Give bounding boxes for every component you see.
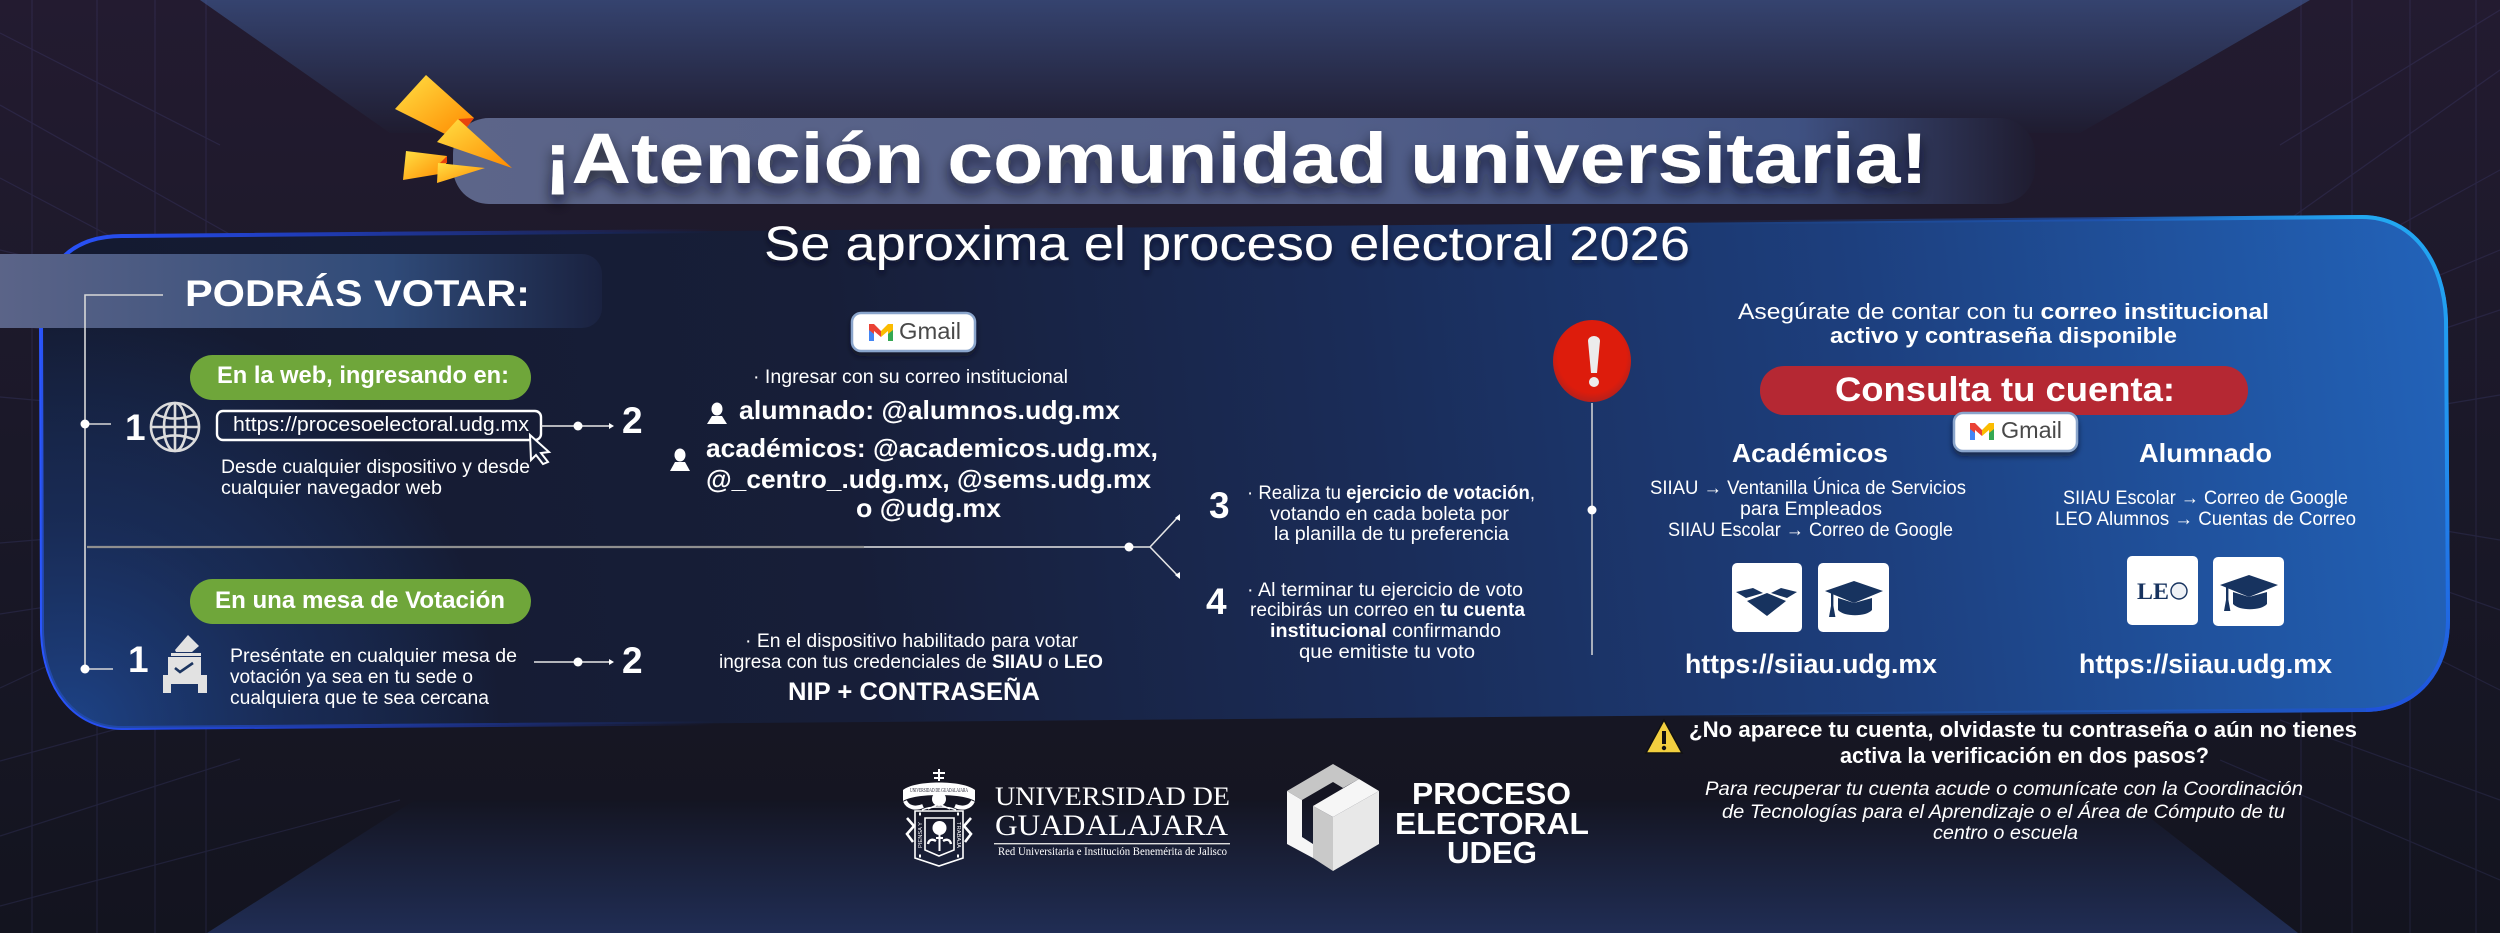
icon: hexagon cube bbox=[1287, 764, 1379, 871]
recovery note: centro o escuela bbox=[1933, 823, 2078, 844]
polling credentials text: ingresa con tus credenciales de SIIAU o LEO bbox=[719, 652, 1103, 673]
text: gmail login instructions: alumnado: @alumnos.udg.mx bbox=[739, 395, 1121, 425]
polling description: votación ya sea en tu sede o bbox=[230, 667, 473, 688]
logo: proceso electoral udeg: PROCESO bbox=[1412, 776, 1571, 811]
polling description: Preséntate en cualquier mesa de bbox=[230, 646, 517, 667]
icon: crest: PIENSA Y bbox=[918, 821, 924, 848]
button: consulta tu cuenta bbox=[1760, 366, 2248, 415]
badge: gmail top: Gmail bbox=[899, 318, 961, 344]
step number 1: 1 bbox=[125, 407, 146, 448]
section: voting at a polling table bbox=[128, 579, 1103, 709]
badge: gmail second: Gmail bbox=[2001, 417, 2062, 443]
icon: leo tile: LE bbox=[2137, 579, 2169, 604]
subtitle: Se aproxima el proceso electoral 2026 bbox=[764, 218, 1690, 271]
column: alumnado: SIIAU Escolar → Correo de Google bbox=[2063, 488, 2348, 509]
url box bbox=[217, 411, 541, 440]
icon: student person bbox=[707, 402, 727, 424]
web description: cualquier navegador web bbox=[221, 478, 442, 499]
pill: en la web bbox=[190, 355, 531, 400]
polling credentials text: · En el dispositivo habilitado para votar bbox=[745, 631, 1079, 652]
logo: proceso electoral udeg: ELECTORAL bbox=[1395, 806, 1589, 841]
logo: universidad de guadalajara: GUADALAJARA bbox=[995, 809, 1228, 842]
warning message: ¿No aparece tu cuenta, olvidaste tu contraseña o aún no tienes bbox=[1689, 717, 2357, 742]
column: académicos: SIIAU Escolar → Correo de Google bbox=[1668, 520, 1953, 541]
panel border: right edge bbox=[2362, 217, 2448, 710]
recovery note bbox=[1705, 779, 2303, 844]
step 3: la planilla de tu preferencia bbox=[1274, 524, 1509, 545]
step number 2: 2 bbox=[622, 640, 643, 681]
section: voting on the web bbox=[125, 355, 643, 499]
logo: universidad de guadalajara bbox=[903, 769, 1230, 866]
step number 1: 1 bbox=[128, 639, 149, 680]
badge: gmail second bbox=[1954, 413, 2077, 451]
web description: Desde cualquier dispositivo y desde bbox=[221, 457, 530, 478]
pill: en una mesa bbox=[190, 579, 531, 624]
badge: gmail top bbox=[852, 313, 975, 351]
polling description bbox=[230, 646, 517, 709]
title bar bbox=[453, 118, 2035, 204]
logo: proceso electoral udeg: UDEG bbox=[1447, 835, 1537, 870]
column: académicos: para Empleados bbox=[1740, 499, 1882, 520]
icon: globe bbox=[151, 403, 199, 451]
step 3: votando en cada boleta por bbox=[1270, 504, 1510, 525]
recovery note: de Tecnologías para el Aprendizaje o el Área de Cómputo de tu bbox=[1722, 802, 2285, 823]
icon: crest bbox=[903, 769, 975, 866]
icon: staff person bbox=[670, 448, 690, 471]
heading band: podrás votar: PODRÁS VOTAR: bbox=[185, 273, 530, 314]
step number 2: 2 bbox=[622, 400, 643, 441]
column: alumnado: Alumnado bbox=[2139, 438, 2272, 468]
icon: siiau tile bbox=[1732, 563, 1802, 632]
polling credentials text: NIP + CONTRASEÑA bbox=[788, 676, 1040, 706]
title: ¡Atención comunidad universitaria! bbox=[544, 120, 1928, 199]
step 4: recibirás un correo en tu cuenta bbox=[1250, 600, 1525, 621]
icon: ballot box bbox=[163, 635, 207, 693]
step 3: 3 bbox=[1209, 485, 1230, 526]
column: alumnado bbox=[2055, 438, 2356, 679]
arrow to step 2 bbox=[534, 658, 614, 666]
web description bbox=[221, 457, 530, 499]
step 3: · Realiza tu ejercicio de votación, bbox=[1247, 483, 1535, 504]
pill: en una mesa: En una mesa de Votación bbox=[215, 587, 505, 614]
logo: universidad de guadalajara: UNIVERSIDAD DE bbox=[995, 782, 1230, 811]
column: alumnado: https://siiau.udg.mx bbox=[2079, 649, 2332, 679]
arrow to step 2 bbox=[541, 422, 614, 430]
heading band: podrás votar bbox=[0, 254, 602, 328]
step 3 bbox=[1209, 483, 1535, 545]
text: gmail login instructions: · Ingresar con su correo institucional bbox=[753, 367, 1068, 388]
text: gmail login instructions: @_centro_.udg.mx, @sems.udg.mx bbox=[706, 464, 1152, 494]
step 4: institucional confirmando bbox=[1270, 621, 1501, 642]
panel: main rounded blue panel bbox=[41, 217, 2448, 728]
logo: proceso electoral udeg bbox=[1287, 764, 1589, 871]
polling description: cualquiera que te sea cercana bbox=[230, 688, 489, 709]
connector lines: left tree bbox=[80, 295, 163, 674]
pill: en la web: En la web, ingresando en: bbox=[217, 362, 509, 389]
step 4: · Al terminar tu ejercicio de voto bbox=[1247, 580, 1523, 601]
icon: warning triangle bbox=[1646, 720, 1682, 753]
logo: universidad de guadalajara: Red Universitaria e Institución Benemérita de Jalisco bbox=[998, 846, 1227, 858]
icon: crest: TRABAJA bbox=[955, 822, 961, 849]
panel glow: lower left bbox=[41, 217, 2448, 728]
account check intro text: activo y contraseña disponible bbox=[1830, 323, 2177, 348]
column: académicos: https://siiau.udg.mx bbox=[1685, 649, 1937, 679]
account check intro text: Asegúrate de contar con tu correo institucional bbox=[1738, 299, 2269, 324]
text: gmail login instructions bbox=[670, 367, 1158, 523]
recovery note: Para recuperar tu cuenta acude o comunícate con la Coordinación bbox=[1705, 779, 2303, 800]
account check intro text bbox=[1738, 299, 2269, 348]
icon: graduation cap tile bbox=[2213, 557, 2284, 626]
connector: horizontal fork to steps 3 and 4 bbox=[87, 514, 1180, 579]
icon: cursor bbox=[530, 435, 549, 464]
url box: https://procesoelectoral.udg.mx bbox=[233, 414, 529, 436]
warning message: activa la verificación en dos pasos? bbox=[1840, 743, 2209, 768]
polling credentials text bbox=[719, 631, 1103, 706]
panel border: top right edge bbox=[2100, 217, 2362, 219]
text: gmail login instructions: académicos: @academicos.udg.mx, bbox=[706, 433, 1158, 463]
column: académicos: SIIAU → Ventanilla Única de Servicios bbox=[1650, 477, 1966, 499]
warning message bbox=[1646, 717, 2357, 844]
text: gmail login instructions: o @udg.mx bbox=[856, 493, 1002, 523]
column: académicos bbox=[1650, 438, 1966, 679]
step 4: que emitiste tu voto bbox=[1299, 642, 1475, 663]
button: consulta tu cuenta: Consulta tu cuenta: bbox=[1835, 371, 2175, 409]
icon: lightning bolts bbox=[395, 75, 512, 183]
icon: alert balloon with line bbox=[1553, 320, 1631, 655]
icon: graduation cap tile bbox=[1818, 563, 1889, 632]
column: académicos: Académicos bbox=[1732, 438, 1888, 468]
icon: crest: UNIVERSIDAD DE GUADALAJARA bbox=[910, 788, 968, 794]
column: alumnado: LEO Alumnos → Cuentas de Correo bbox=[2055, 509, 2356, 530]
step 4 bbox=[1206, 580, 1525, 663]
step 4: 4 bbox=[1206, 581, 1227, 622]
icon: leo tile bbox=[2127, 556, 2198, 625]
